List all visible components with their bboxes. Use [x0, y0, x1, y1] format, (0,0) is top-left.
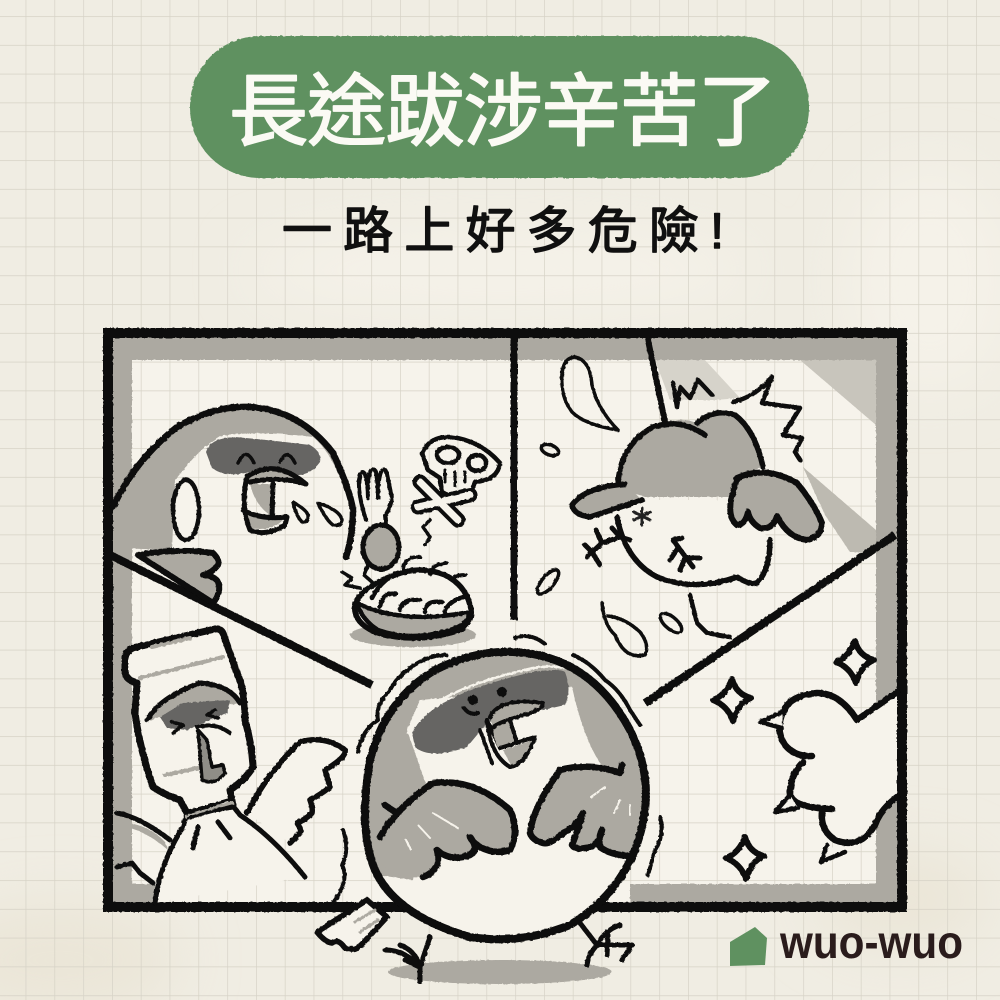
panel: poisoned food [113, 407, 500, 647]
brand name: wuo-wuo [779, 916, 963, 968]
body [155, 806, 305, 903]
left wing [117, 813, 170, 883]
fork and hand [359, 469, 399, 569]
left wing [378, 782, 515, 877]
tail [317, 900, 387, 949]
ground shadow [388, 960, 612, 984]
bottle [125, 629, 253, 813]
icon: house [730, 927, 767, 966]
logo [730, 916, 963, 968]
bird face [238, 454, 342, 533]
poison skull [418, 437, 500, 545]
title pill [190, 36, 809, 178]
impact burst [673, 377, 802, 460]
falling feathers [534, 357, 685, 656]
subtitle: 一路上好多危險! [282, 203, 724, 259]
plate of food [342, 552, 476, 647]
shaking lines [333, 636, 662, 903]
panel: bird stuck in bottle [117, 629, 345, 903]
panel: window collision [534, 340, 822, 656]
sparkles [713, 641, 874, 879]
panel: predator paw with sparkles [713, 641, 897, 879]
claw paw [760, 692, 897, 862]
falling bird [572, 413, 822, 637]
comic frame: grey bands, diagonals and border [108, 333, 902, 907]
bird wing [138, 480, 219, 603]
right wing [530, 765, 637, 857]
legs [385, 923, 632, 982]
main shaking bird [317, 636, 662, 984]
right wing [247, 740, 345, 843]
round body [365, 652, 646, 939]
face [464, 689, 543, 767]
title text: 長途跋涉辛苦了 [229, 67, 777, 156]
trapped bird face [147, 683, 240, 818]
bird head and back [113, 407, 353, 557]
